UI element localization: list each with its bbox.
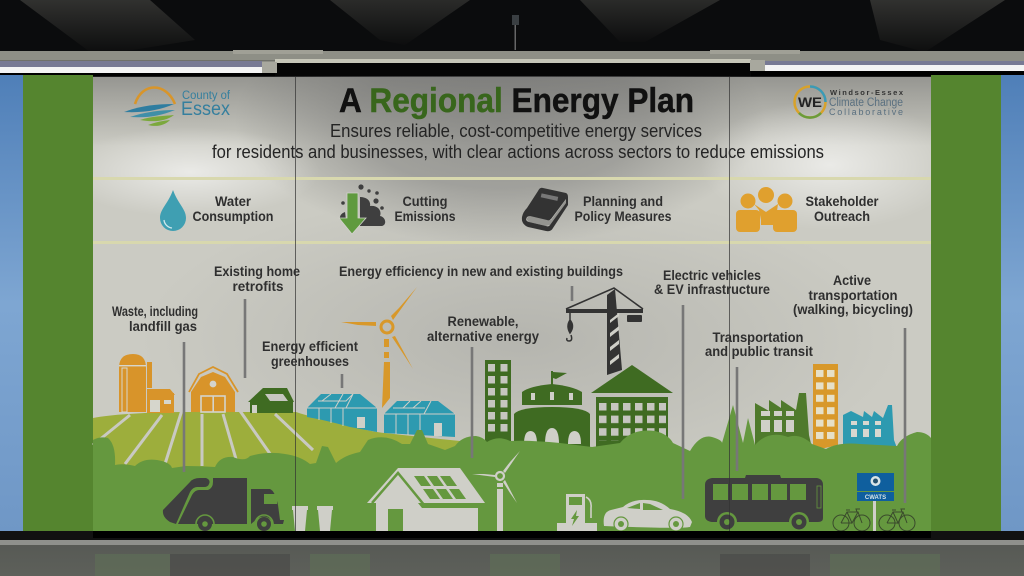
label: existing home retrofits: retrofits [232,279,284,294]
green factory [755,393,812,448]
label: waste, including landfill gas: landfill gas [129,319,197,334]
barn [189,367,238,412]
label: electric vehicles: & EV infrastructure [654,282,770,297]
bicycles [833,509,915,531]
heading: water consumption: Water [215,194,252,209]
label: renewable, alternative energy: Renewable, [448,314,518,329]
icon: book [522,188,568,231]
logo: Windsor-Essex Climate Change Collaborative: Windsor-Essex [830,88,904,97]
light fixture rail [0,50,1024,77]
logo: County of Essex: County of [182,90,231,102]
icon: water drop [160,190,186,231]
label: transportation and public transit [705,330,813,359]
EV charging station [557,494,597,531]
orange tower [813,364,838,449]
logo: Windsor-Essex Climate Change Collaborative: Collaborative [829,107,903,117]
label: active transportation: (walking, bicycling) [793,302,913,317]
label: existing home retrofits [214,264,300,294]
white house with solar panels [367,468,485,531]
domed civic building [514,371,590,447]
label: electric vehicles [654,268,770,297]
farm silo and shed [119,354,175,413]
station ceiling [0,0,1024,52]
title: A Regional Energy Plan [339,82,694,120]
label: energy efficiency in buildings: Energy efficiency in new and existing buildings [339,264,623,279]
subtitle: for residents and businesses, with clear actions across sectors to reduce emissions [212,142,824,162]
label: energy efficient greenhouses: Energy efficient [262,339,358,354]
label: active transportation: Active [833,273,871,288]
car [604,500,692,531]
logo: Windsor-Essex Climate Change Collaborative: Climate Change [829,97,903,109]
tall green apartment [485,360,511,445]
logo: Windsor-Essex Climate Change Collaborative: WE [798,94,822,110]
white wind turbine [472,451,520,531]
heading: cutting emissions [394,194,456,224]
label: transportation and public transit: and public transit [705,344,813,359]
label: electric vehicles: Electric vehicles [663,268,761,283]
green house with solar roof [248,388,294,413]
CWATS sign: CWATS [865,495,886,501]
heading: stakeholder outreach: Outreach [814,209,870,224]
icon: orange wind turbine [341,287,417,408]
heading: planning and policy measures: Policy Measures [574,209,672,224]
crane [566,288,643,375]
subtitle: Ensures reliable, cost-competitive energy services [330,121,702,141]
green roof apartment block [591,365,673,447]
panel seams [296,77,730,531]
greenhouses [307,394,455,437]
label: existing home retrofits: Existing home [214,264,300,279]
icon: stakeholder group [736,187,797,232]
heading: stakeholder outreach [806,194,879,224]
subtitle [212,121,824,162]
label: waste, including landfill gas [112,304,198,334]
logo: County of Essex [124,88,231,126]
logo: Windsor-Essex Climate Change Collaborative [794,86,904,118]
station floor [0,531,1024,576]
icon: cutting emissions [339,184,385,234]
garbage bins [292,506,333,531]
label: renewable, alternative energy: alternative energy [427,329,539,344]
heading: water consumption: Consumption [192,209,274,224]
label: energy efficient greenhouses: greenhouses [271,354,349,369]
label: waste, including landfill gas: Waste, including [112,304,198,319]
heading: planning and policy measures: Planning and [583,194,663,209]
label: active transportation [793,273,913,317]
label: transportation and public transit: Transportation [712,330,804,345]
logo: County of Essex: Essex [181,99,230,120]
main panel background [93,76,931,451]
label: active transportation: transportation [808,288,898,303]
bus [705,475,823,532]
side walls [0,75,1024,532]
heading: cutting emissions: Emissions [394,209,456,224]
label: renewable, alternative energy [427,314,539,344]
heading: cutting emissions: Cutting [402,194,448,209]
leader lines [184,286,905,503]
farm field [93,408,460,480]
teal factory [843,405,897,448]
heading: planning and policy measures [574,194,672,224]
ground and bushes [93,405,931,531]
heading: water consumption [192,194,274,224]
heading: stakeholder outreach: Stakeholder [806,194,879,209]
CWATS sign [857,473,894,531]
label: energy efficient greenhouses [262,339,358,369]
garbage truck [163,478,284,533]
